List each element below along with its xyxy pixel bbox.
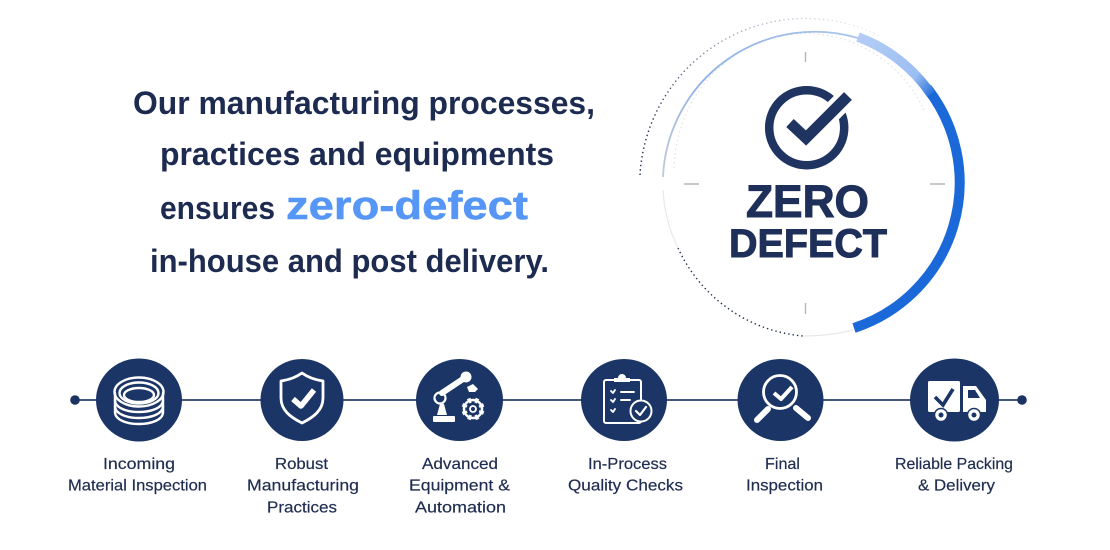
zero defect badge bbox=[640, 18, 960, 336]
faint lower ring bbox=[663, 190, 853, 336]
label: Equipment & bbox=[409, 478, 510, 494]
label: Manufacturing bbox=[247, 478, 359, 494]
lower dotted arc bbox=[678, 248, 803, 336]
inner faint dotted arc bbox=[674, 34, 925, 168]
label bbox=[68, 456, 207, 494]
label bbox=[409, 456, 510, 516]
label bbox=[247, 456, 359, 516]
label bbox=[568, 456, 683, 494]
thin progress ring bbox=[663, 32, 858, 177]
icon: robot arm and gear bbox=[433, 372, 483, 422]
label bbox=[895, 456, 1013, 494]
icon: shield bbox=[281, 373, 323, 423]
label: Inspection bbox=[746, 478, 823, 494]
badge title bbox=[729, 176, 887, 266]
badge title: DEFECT bbox=[729, 222, 887, 266]
label: Reliable Packing bbox=[895, 456, 1013, 473]
headline: ensures bbox=[160, 190, 275, 226]
step 3: advanced equipment and automation bbox=[409, 359, 510, 516]
tick marks bbox=[684, 52, 945, 314]
label: Final bbox=[765, 456, 800, 473]
label: & Delivery bbox=[918, 478, 995, 494]
headline: in-house and post delivery. bbox=[150, 243, 549, 279]
headline: zero-defect bbox=[286, 184, 528, 228]
icon: magnifier bbox=[757, 376, 808, 420]
headline: Our manufacturing processes, bbox=[133, 85, 595, 121]
headline bbox=[133, 85, 595, 279]
step 4: in-process quality checks bbox=[568, 359, 683, 494]
step 5: final inspection bbox=[738, 359, 824, 494]
blue arc segment bbox=[854, 88, 960, 328]
icon: delivery truck bbox=[928, 381, 986, 422]
label: Practices bbox=[267, 500, 337, 516]
step 1: incoming material inspection bbox=[68, 358, 207, 494]
label: Material Inspection bbox=[68, 478, 207, 494]
badge title: ZERO bbox=[746, 176, 869, 227]
label: Incoming bbox=[103, 456, 175, 473]
light arc segment bbox=[858, 37, 931, 94]
label: Quality Checks bbox=[568, 478, 683, 494]
outer dotted arc bbox=[640, 18, 880, 175]
headline: practices and equipments bbox=[160, 136, 554, 172]
icon: clipboard bbox=[604, 374, 652, 423]
label: In-Process bbox=[588, 456, 667, 473]
timeline bbox=[70, 395, 1027, 405]
label bbox=[746, 456, 823, 494]
icon: rings bbox=[114, 378, 164, 424]
label: Robust bbox=[275, 456, 329, 473]
label: Advanced bbox=[422, 456, 498, 473]
icon: check in circle bbox=[769, 90, 848, 165]
step 6: reliable packing and delivery bbox=[895, 358, 1013, 494]
label: Automation bbox=[415, 500, 506, 516]
step 2: robust manufacturing practices bbox=[247, 359, 359, 516]
